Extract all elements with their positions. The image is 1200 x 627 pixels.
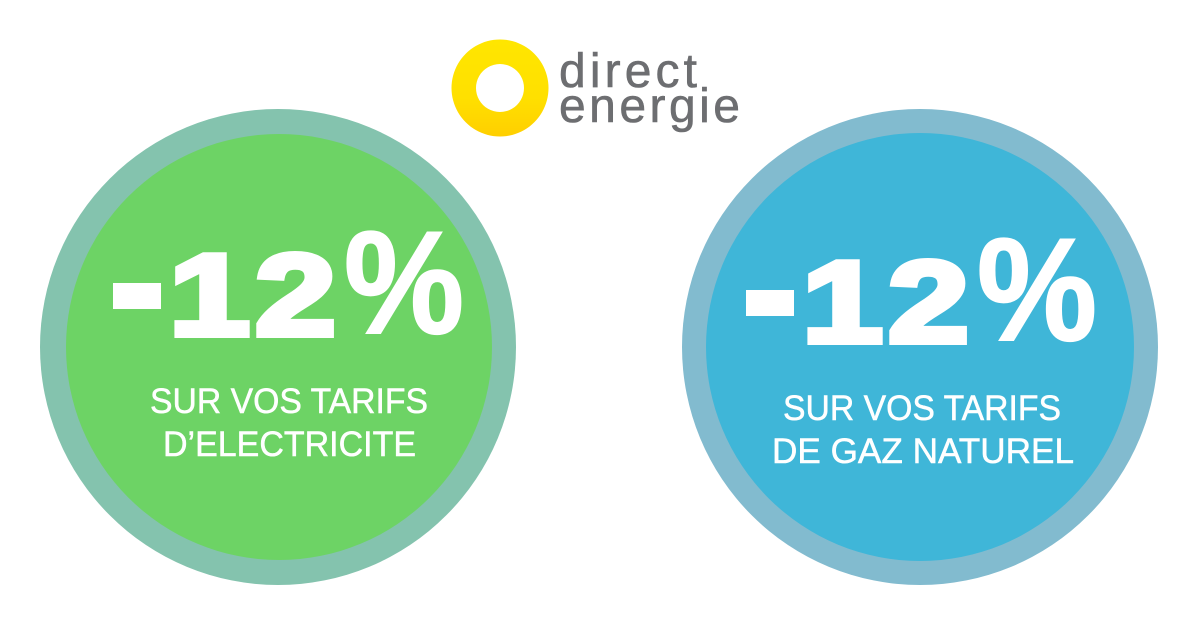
big number: -12%: % — [344, 201, 464, 364]
green circle — [40, 109, 516, 585]
logo wordmark: direct — [559, 45, 697, 98]
big number: -12%: % — [977, 208, 1097, 371]
big number: -12% — [746, 208, 1097, 371]
caption: electricity — [150, 382, 428, 464]
logo: direct energie — [452, 40, 740, 136]
caption: natural gas — [772, 389, 1074, 471]
big number: -12%: 2 — [255, 230, 336, 360]
icon: yellow ring — [452, 40, 549, 136]
big number: -12%: 1 — [169, 230, 250, 360]
caption: electricity: SUR VOS TARIFS — [150, 382, 428, 421]
big number: -12%: 1 — [802, 237, 883, 367]
blue circle — [682, 109, 1158, 585]
big number: -12%: 2 — [888, 237, 969, 367]
caption: electricity: D’ELECTRICITE — [163, 425, 416, 464]
panel: electricity discount — [40, 109, 516, 585]
caption: natural gas: DE GAZ NATUREL — [772, 432, 1074, 471]
caption: natural gas: SUR VOS TARIFS — [783, 389, 1061, 428]
logo wordmark: energie — [559, 80, 740, 133]
panel: natural gas discount — [682, 109, 1158, 585]
big number: -12% — [113, 201, 464, 364]
logo wordmark — [559, 45, 740, 133]
